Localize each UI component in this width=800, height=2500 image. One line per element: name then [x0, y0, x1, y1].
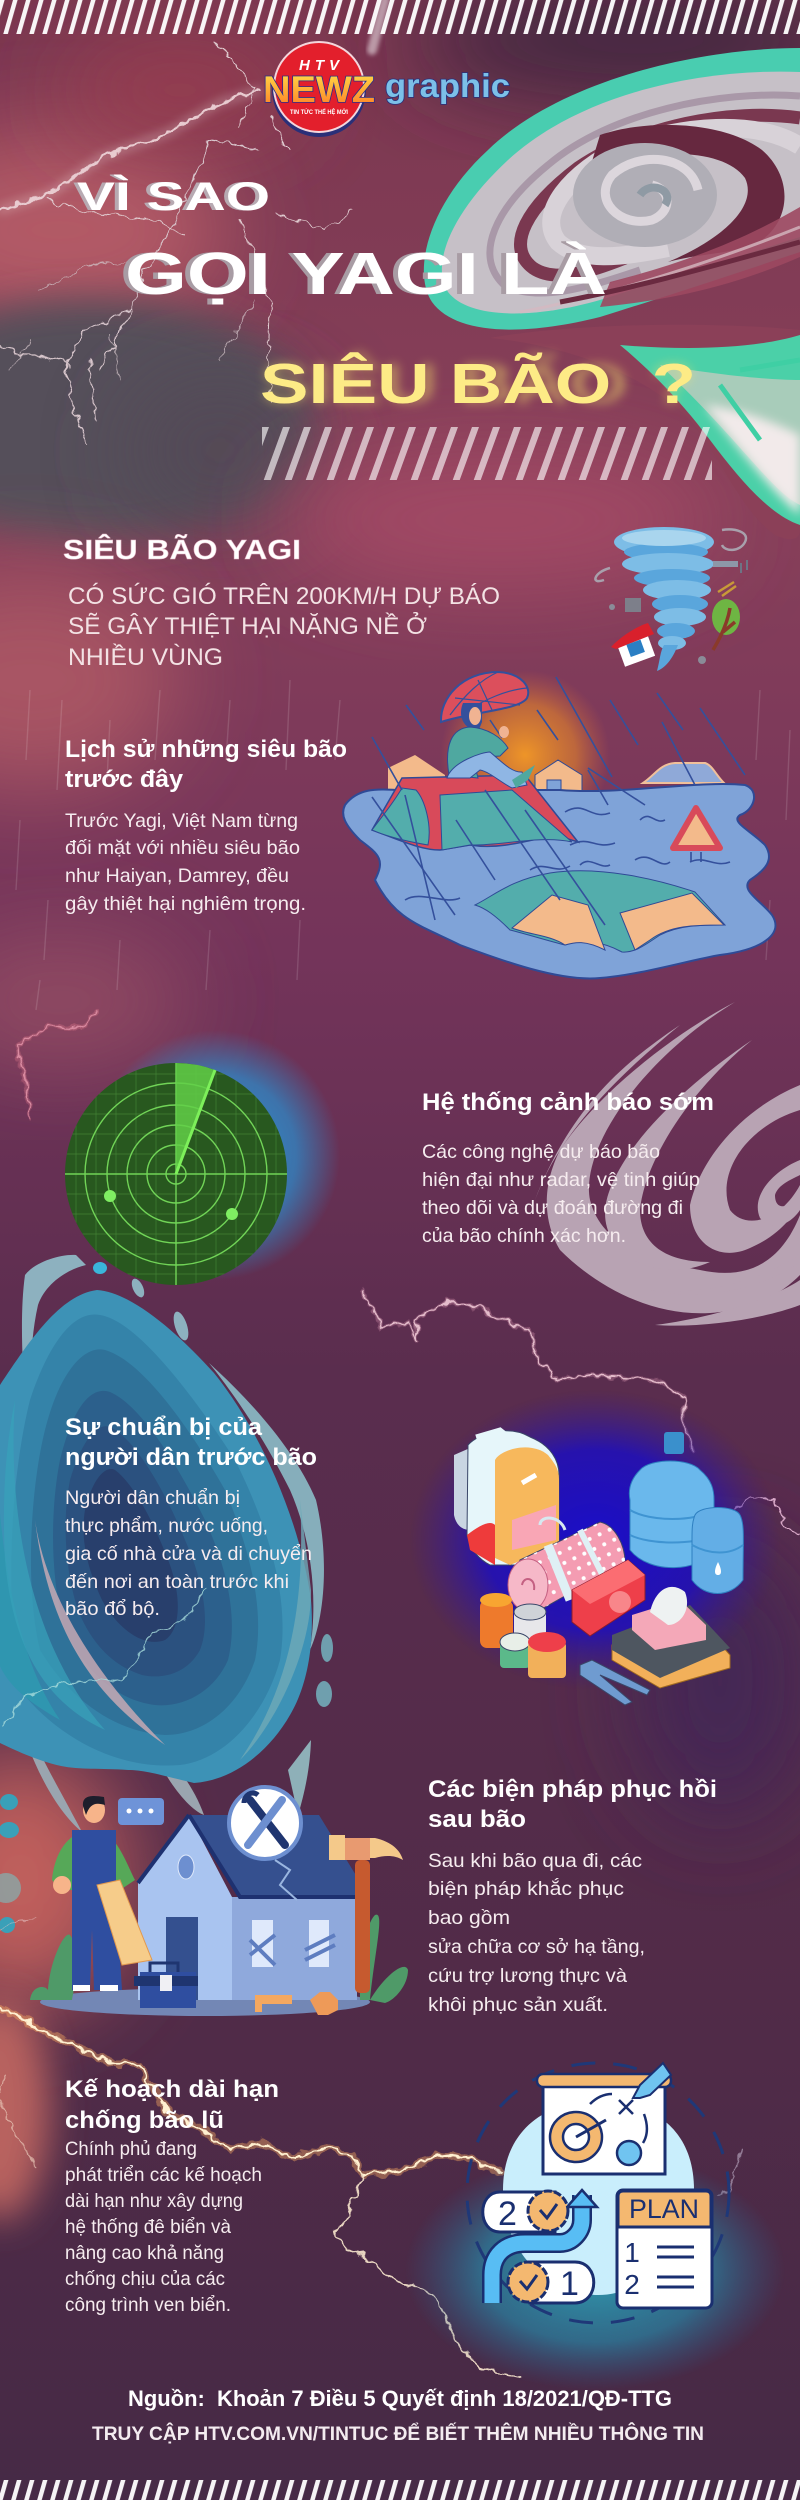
- cyclone wisps: [22, 1255, 86, 1405]
- text: long-term plan: dài hạn như xây dựng: [65, 2190, 243, 2212]
- tornado funnel: [614, 527, 714, 671]
- small typhoon swirl: [535, 1002, 800, 1326]
- heading: history: trước đây: [65, 766, 184, 793]
- text: recovery: cứu trợ lương thực và: [428, 1965, 627, 1987]
- lead heading: SIÊU BÃO YAGI: [63, 534, 301, 565]
- background car: [643, 763, 724, 783]
- plan card: [617, 2190, 712, 2308]
- icon: tornado: [595, 527, 747, 671]
- plan glow: [405, 2150, 785, 2390]
- illustration: plan: [405, 2063, 785, 2390]
- text: preparation: gia cố nhà cửa và di chuyển: [65, 1543, 312, 1565]
- speech bubble: [118, 1798, 164, 1825]
- plants: [30, 1934, 77, 2000]
- lightning: top left: [0, 0, 385, 445]
- title line 3: SIÊU BÃO ?: [260, 351, 696, 416]
- cyclone droplets: [93, 1262, 107, 1274]
- logo NEWZ wordmark: NEWZ: [263, 69, 375, 110]
- section: long-term plan: [65, 2076, 279, 2316]
- text: history: Trước Yagi, Việt Nam từng: [65, 810, 298, 832]
- text: history: gây thiệt hại nghiêm trọng.: [65, 893, 306, 915]
- section: recovery: [428, 1776, 717, 2016]
- pliers: [580, 1660, 650, 1705]
- plan dome: [503, 2100, 694, 2295]
- hammer: [329, 1835, 403, 1993]
- heading: preparation: Sự chuẩn bị của: [65, 1414, 263, 1441]
- lead text: CÓ SỨC GIÓ TRÊN 200KM/H DỰ BÁO: [68, 583, 500, 610]
- swirl dark crescent: [590, 125, 784, 262]
- step 1: [508, 2262, 594, 2303]
- whiteboard: [537, 2074, 671, 2174]
- section: history: [65, 736, 347, 915]
- title line 2: GỌI YAGI LÀ: [125, 241, 607, 307]
- lead block: [63, 534, 500, 671]
- logo: HTV Newz graphic: [263, 42, 510, 137]
- swirl: typhoon top right: [424, 48, 800, 539]
- text: long-term plan: hệ thống đê biển và: [65, 2216, 231, 2238]
- kit glow: [410, 1390, 780, 1690]
- submerged building: [372, 775, 578, 850]
- text: recovery: biện pháp khắc phục: [428, 1877, 624, 1900]
- roof crack: [275, 1860, 297, 1900]
- rolled mat: [508, 1518, 625, 1611]
- text: preparation: [65, 1487, 312, 1620]
- text: history: như Haiyan, Damrey, đều: [65, 865, 289, 887]
- text: recovery: Sau khi bão qua đi, các: [428, 1850, 642, 1872]
- text: early warning: Các công nghệ dự báo bão: [422, 1141, 660, 1163]
- house side wall: [232, 1897, 357, 2000]
- plan card: 2: [624, 2269, 640, 2300]
- flood water: [343, 784, 775, 978]
- text: history: [65, 810, 306, 915]
- text: early warning: [422, 1141, 700, 1247]
- rain texture: [16, 680, 790, 1010]
- radar rings: [65, 1063, 287, 1285]
- first aid bag: [572, 1560, 645, 1636]
- house front: [138, 1815, 232, 2000]
- logo graphic wordmark: graphic: [385, 67, 510, 104]
- lightning: bottom: [0, 2008, 742, 2377]
- text: long-term plan: công trình ven biển.: [65, 2294, 231, 2316]
- big cyclone: [0, 1255, 333, 1933]
- person with umbrella: [441, 672, 535, 788]
- background house left: [388, 755, 445, 795]
- flying debris: [595, 530, 746, 581]
- boarded windows: [250, 1920, 335, 1967]
- cans: [480, 1593, 566, 1678]
- heading: early warning: Hệ thống cảnh báo sớm: [422, 1089, 714, 1116]
- text: long-term plan: Chính phủ đang: [65, 2138, 197, 2160]
- roof: [189, 1815, 357, 1897]
- icon: wrench and screwdriver: [229, 1787, 301, 1859]
- text: preparation: Người dân chuẩn bị: [65, 1487, 240, 1509]
- heading: history: [65, 736, 347, 793]
- heading: preparation: [65, 1414, 317, 1471]
- lightning: left small: [18, 1010, 97, 1117]
- radar glow: [90, 1030, 340, 1280]
- title line 3: SIÊU BÃO ?: [260, 351, 696, 416]
- text: long-term plan: phát triển các kế hoạch: [65, 2164, 262, 2186]
- text: preparation: thực phẩm, nước uống,: [65, 1515, 268, 1537]
- toolbox: [134, 1963, 198, 2008]
- heading: long-term plan: chống bão lũ: [65, 2107, 224, 2134]
- text: early warning: theo dõi và dự đoán đường đi: [422, 1197, 683, 1219]
- heading: preparation: người dân trước bão: [65, 1444, 317, 1471]
- worker: [52, 1796, 152, 1991]
- step 2: 2: [498, 2195, 517, 2233]
- title: [73, 174, 696, 416]
- title line 2: GỌI YAGI LÀ: [120, 241, 602, 307]
- plan dashed ring: [467, 2063, 729, 2323]
- footer: [92, 2386, 704, 2445]
- text: recovery: bao gồm: [428, 1907, 510, 1929]
- text: early warning: của bão chính xác hơn.: [422, 1225, 626, 1247]
- pen: [633, 2063, 671, 2098]
- lead text: NHIỀU VÙNG: [68, 643, 223, 671]
- bolt and nut: [255, 1992, 338, 2015]
- radar grid: [60, 1060, 290, 1290]
- tissue box and mask: [612, 1587, 730, 1688]
- radar sweep: [176, 1063, 215, 1174]
- bottom stripes: [0, 2480, 800, 2500]
- water jug: [629, 1432, 714, 1568]
- radar blips: [104, 1190, 116, 1202]
- text: history: đối mặt với nhiều siêu bão: [65, 837, 300, 859]
- illustration: flooded scene: [343, 670, 775, 978]
- illustration: house repair: [30, 1787, 408, 2016]
- door: [166, 1917, 198, 2000]
- section: early warning: [422, 1089, 714, 1247]
- lightning: over cyclone: [0, 1590, 204, 1930]
- call to action: TRUY CẬP HTV.COM.VN/TINTUC ĐỂ BIẾT THÊM NHIỀU THÔNG TIN: [92, 2423, 704, 2445]
- backpack: [454, 1430, 559, 1565]
- heading: recovery: sau bão: [428, 1806, 526, 1833]
- text: recovery: [428, 1850, 645, 2016]
- section: preparation: [65, 1414, 317, 1620]
- title stripes: [262, 427, 712, 480]
- title line 1: VÌ SAO: [73, 174, 266, 219]
- step 2: [483, 2191, 568, 2233]
- heading: long-term plan: [65, 2076, 279, 2134]
- text: recovery: sửa chữa cơ sở hạ tầng,: [428, 1936, 645, 1958]
- text: preparation: bão đổ bộ.: [65, 1598, 160, 1620]
- text: recovery: khôi phục sản xuất.: [428, 1994, 608, 2016]
- logo tagline: TIN TỨC THẾ HỆ MỚI: [290, 106, 348, 116]
- lightning: middle: [362, 1292, 800, 1535]
- flying tree: [712, 599, 740, 635]
- logo HTV wordmark: HTV: [299, 57, 341, 74]
- plan card: PLAN: [629, 2194, 699, 2224]
- flying house: [611, 623, 655, 667]
- text: long-term plan: chống chịu của các: [65, 2268, 225, 2290]
- warning triangle: [673, 808, 720, 862]
- small bottle: [692, 1508, 743, 1594]
- cyclone body: [0, 1290, 312, 1783]
- heading: recovery: [428, 1776, 717, 1833]
- ground: [40, 1988, 370, 2016]
- step 1: 1: [560, 2265, 579, 2303]
- title line 1: [73, 174, 270, 219]
- plan card: 1: [624, 2237, 640, 2268]
- title line 1: VÌ SAO: [77, 174, 270, 219]
- heading: recovery: Các biện pháp phục hồi: [428, 1776, 717, 1803]
- text: long-term plan: nâng cao khả năng: [65, 2242, 224, 2264]
- step arrow: [492, 2195, 582, 2303]
- lead text: [68, 583, 500, 671]
- illustration: emergency kit: [410, 1390, 780, 1705]
- attic window: [178, 1855, 194, 1879]
- text: early warning: hiện đại như radar, vệ tinh giúp: [422, 1169, 700, 1191]
- source line: Nguồn: Khoản 7 Điều 5 Quyết định 18/2021/QĐ-TTG: [128, 2386, 672, 2411]
- text: preparation: đến nơi an toàn trước khi: [65, 1571, 289, 1593]
- top stripes: [0, 0, 800, 34]
- text: long-term plan: [65, 2138, 262, 2316]
- radar: [60, 1030, 340, 1290]
- heading: history: Lịch sử những siêu bão: [65, 736, 347, 763]
- background house right: [535, 760, 582, 795]
- lead text: SẼ GÂY THIỆT HẠI NẶNG NỀ Ở: [68, 611, 427, 640]
- rain and waves: [372, 677, 745, 925]
- submerged car: [475, 871, 725, 952]
- heading: long-term plan: Kế hoạch dài hạn: [65, 2076, 279, 2103]
